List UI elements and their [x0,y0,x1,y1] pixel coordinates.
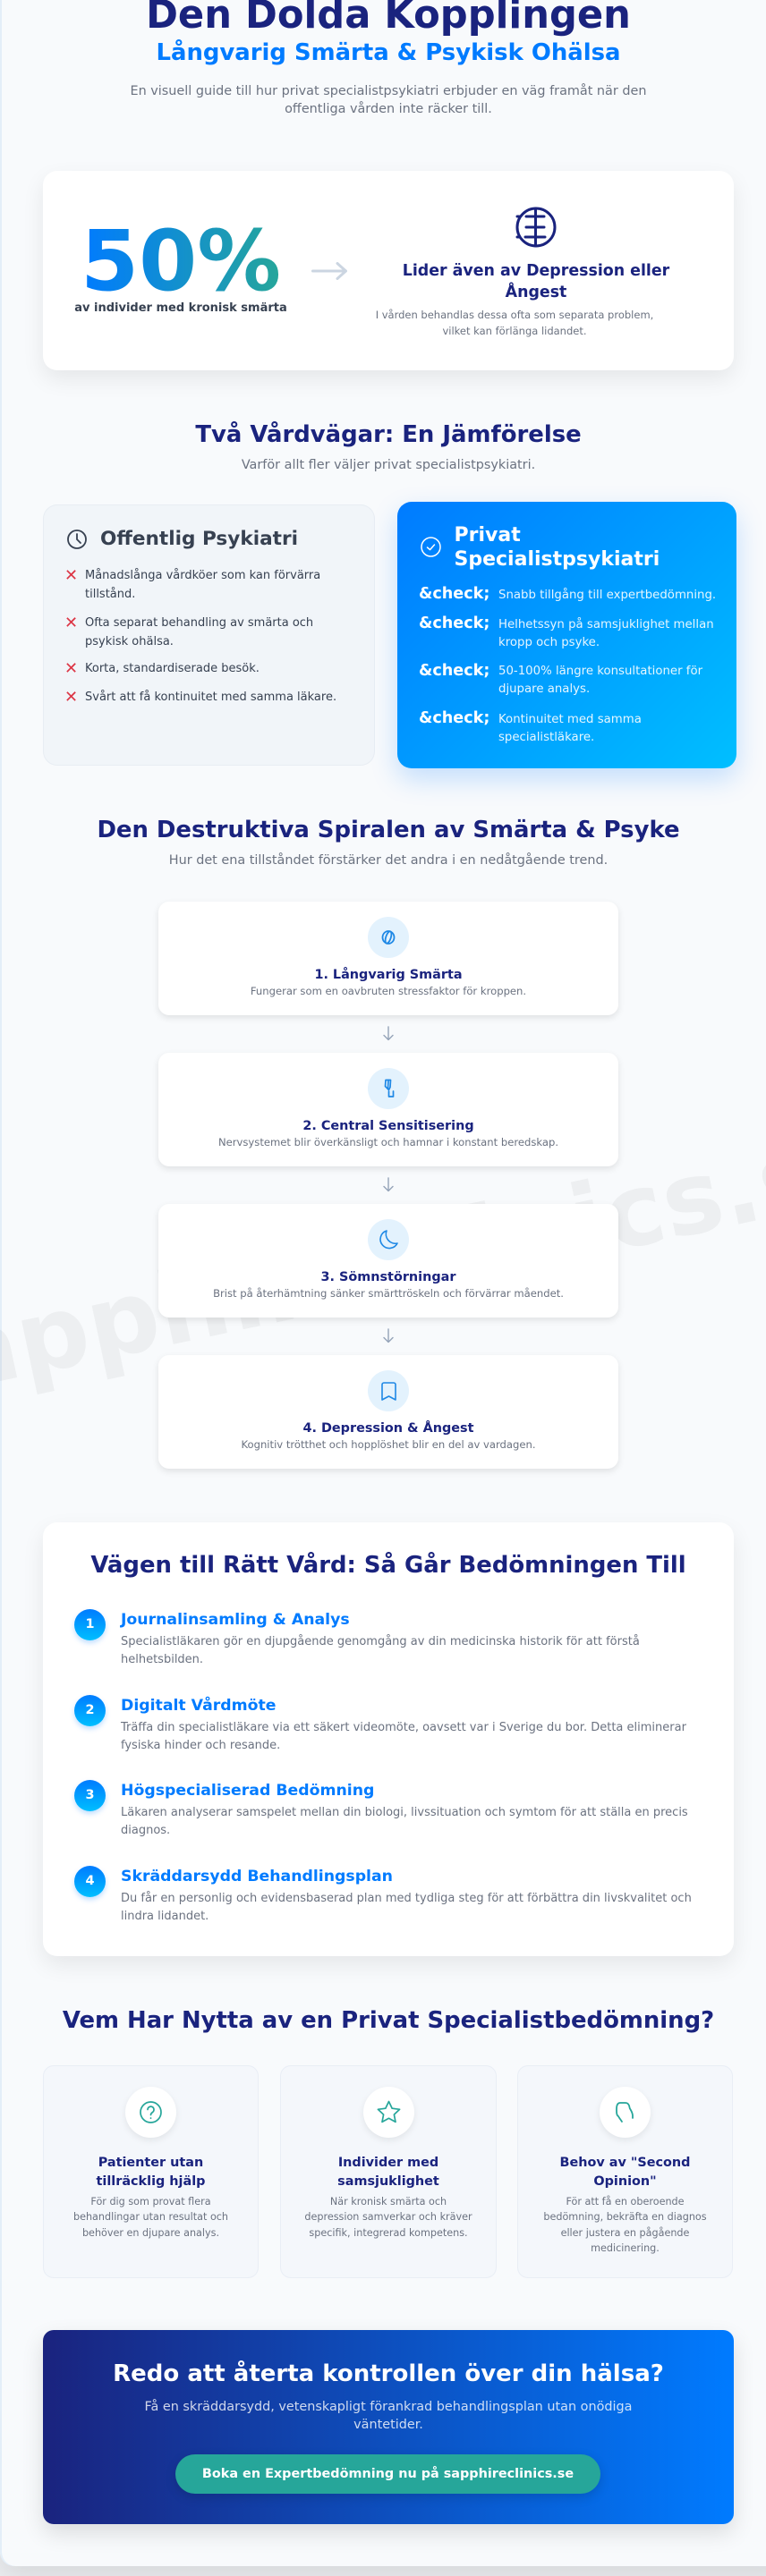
arrow down [383,1026,394,1041]
subtitle: Långvarig Smärta & Psykisk Ohälsa [156,39,621,66]
step text: helhetsbilden. [121,1653,203,1666]
item 3: &check; [419,662,489,680]
number badge [74,1609,106,1640]
card text [543,2195,707,2254]
card title [337,2156,439,2188]
card text: eller justera en pågående [561,2227,689,2239]
step title: Skräddarsydd Behandlingsplan [121,1868,393,1885]
comorbidity text: vilket kan förlänga lidandet. [442,325,587,337]
number badge [74,1866,106,1896]
step text [121,1891,692,1923]
step title: Digitalt Vårdmöte [121,1696,277,1714]
button: Boka en Expertbedömning nu på sapphireclinics.se [202,2467,574,2481]
card title: Specialistpsykiatri [455,548,660,571]
card text [304,2196,472,2239]
icon: swirl [368,917,409,958]
item 4 [419,709,642,744]
icon: star [363,2087,413,2138]
item 4: Kontinuitet med samma [498,713,642,726]
step text: Nervsystemet blir överkänsligt och hamnar i konstant beredskap. [218,1136,558,1148]
icon: question [125,2087,176,2138]
step text: Kognitiv trötthet och hopplöshet blir en del av vardagen. [241,1438,536,1451]
icon: check circle [421,537,441,557]
step text: Läkaren analyserar samspelet mellan din biologi, livssituation och symtom för att ställa en precis [121,1806,688,1819]
process step 4 [72,1866,692,1923]
card title: Behov av "Second [560,2156,690,2170]
item 2: psykisk ohälsa. [85,635,174,648]
item 1 [64,566,320,601]
item 2: &check; [419,614,489,632]
icon: head [600,2087,651,2138]
item 1: Månadslånga vårdköer som kan förvärra [85,569,320,582]
card text: behandlingar utan resultat och [73,2211,228,2223]
card text: medicinering. [591,2242,660,2254]
step text: fysiska hinder och resande. [121,1739,280,1751]
comparison heading [195,421,582,472]
comorbidity text [376,309,653,337]
item 2: ✕ [64,614,78,632]
number badge [74,1780,106,1811]
audience card 3 [517,2065,733,2278]
item 2: Ofta separat behandling av smärta och [85,616,313,630]
icon: arrow right [311,262,347,280]
card title: Patienter utan [98,2156,203,2170]
header [131,0,646,116]
card title [97,2156,205,2188]
number badge: 3 [85,1788,95,1802]
spiral step 4 [158,1355,618,1469]
spiral step 3 [158,1204,618,1318]
panel: key statistic [43,171,734,370]
step title: 3. Sömnstörningar [321,1270,455,1284]
card text: För dig som provat flera [90,2196,211,2207]
step text: Brist på återhämtning sänker smärttröskeln och förvärrar måendet. [213,1287,564,1300]
text: Få en skräddarsydd, vetenskapligt förankrad behandlingsplan utan onödiga [145,2400,632,2414]
card title [455,524,660,571]
card text: bedömning, bekräfta en diagnos [543,2211,707,2223]
item 4: specialistläkare. [498,731,594,744]
item 4 [64,688,336,707]
panel: public psychiatry [43,504,375,766]
number badge: 4 [85,1873,95,1887]
card title: tillräcklig hjälp [97,2174,205,2188]
text [145,2399,632,2432]
step text: Träffa din specialistläkare via ett säkert videomöte, oavsett var i Sverige du bor. Detta eliminerar [121,1721,686,1733]
audience heading: Vem Har Nytta av en Privat Specialistbedömning? [63,2007,714,2034]
card title: Individer med [338,2156,438,2170]
step text [121,1806,688,1837]
spiral step 2 [158,1053,618,1166]
icon: brain circle [515,208,557,247]
card text: När kronisk smärta och [330,2196,447,2207]
icon: moon [368,1219,409,1260]
intro text [131,83,646,116]
item 3 [419,662,703,696]
statistic label: av individer med kronisk smärta [74,301,287,315]
card title: samsjuklighet [337,2174,439,2188]
arrow down [383,1328,394,1343]
step text: lindra lidandet. [121,1909,209,1923]
panel: private psychiatry [397,502,736,768]
list of drawbacks [64,566,336,707]
card text: depression samverkar och kräver [304,2211,472,2223]
panel: assessment process [43,1522,734,1956]
card title: Privat [455,524,521,547]
card text: behöver en djupare analys. [82,2227,219,2239]
comorbidity heading: Lider även av Depression eller [403,262,669,280]
item 4: ✕ [64,688,78,707]
step title: 2. Central Sensitisering [302,1119,474,1133]
arrow down [383,1177,394,1191]
card text [73,2196,228,2239]
item 3: Korta, standardiserade besök. [85,662,260,675]
card text: specifik, integrerad kompetens. [309,2227,468,2239]
process step 1 [72,1609,640,1666]
step title: 1. Långvarig Smärta [314,968,463,982]
item 2 [419,614,714,649]
item 1: ✕ [64,566,78,585]
heading: Två Vårdvägar: En Jämförelse [195,421,582,448]
item 2: Helhetssyn på samsjuklighet mellan [498,618,714,631]
step text: Du får en personlig och evidensbaserad plan med tydliga steg för att förbättra din livskvalitet och [121,1891,692,1905]
item 1 [419,585,716,603]
step title: 4. Depression & Ångest [302,1421,474,1436]
spiral heading [97,817,680,868]
heading: Den Destruktiva Spiralen av Smärta & Psyke [97,817,680,843]
step title: Högspecialiserad Bedömning [121,1782,374,1800]
item 4: &check; [419,709,489,727]
big number 50%: 50% [81,213,281,310]
item 2: kropp och psyke. [498,636,600,649]
item 3: ✕ [64,659,78,678]
number badge: 2 [85,1703,95,1717]
card title: Opinion" [593,2174,657,2188]
icon: nerve [368,1068,409,1109]
step text: Fungerar som en oavbruten stressfaktor för kroppen. [251,985,526,997]
process step 3 [72,1780,688,1837]
text: väntetider. [353,2418,423,2432]
card title [560,2156,690,2188]
subheading: Varför allt fler väljer privat specialistpsykiatri. [242,458,535,472]
subheading: Hur det ena tillståndet förstärker det andra i en nedåtgående trend. [169,853,608,868]
audience card 1 [43,2065,259,2278]
item 1: &check; [419,585,489,603]
number badge: 1 [85,1617,95,1631]
step text: Specialistläkaren gör en djupgående genomgång av din medicinska historik för att förstå [121,1635,640,1648]
item 1: Snabb tillgång till expertbedömning. [498,589,716,602]
call to action panel [43,2330,734,2524]
intro text: offentliga vården inte räcker till. [285,102,492,116]
heading: Redo att återta kontrollen över din hälsa? [113,2360,664,2387]
step text [120,1721,686,1751]
number badge [74,1694,106,1726]
process step 2 [72,1695,686,1751]
card title: Offentlig Psykiatri [100,528,298,550]
comorbidity heading [403,262,669,301]
step title: Journalinsamling & Analys [121,1611,350,1629]
heading: Vägen till Rätt Vård: Så Går Bedömningen Till [90,1552,686,1579]
spiral step 1 [158,902,618,1015]
audience card 2 [280,2065,497,2278]
comorbidity text: I vården behandlas dessa ofta som separata problem, [376,309,653,321]
icon: bookmark [368,1370,409,1411]
intro text: En visuell guide till hur privat specialistpsykiatri erbjuder en väg framåt när den [131,84,646,98]
icon: clock [67,530,87,549]
item 4: Svårt att få kontinuitet med samma läkare. [85,691,336,704]
list of benefits [419,585,716,744]
item 3: djupare analys. [498,682,590,696]
button [175,2454,600,2494]
card text: För att få en oberoende [566,2196,685,2207]
step text: diagnos. [121,1824,170,1837]
step text [121,1634,640,1666]
comorbidity heading: Ångest [506,284,566,301]
item 3: 50-100% längre konsultationer för [498,665,702,678]
item 2 [64,614,313,648]
item 1: tillstånd. [85,587,135,601]
item 3 [64,659,260,678]
